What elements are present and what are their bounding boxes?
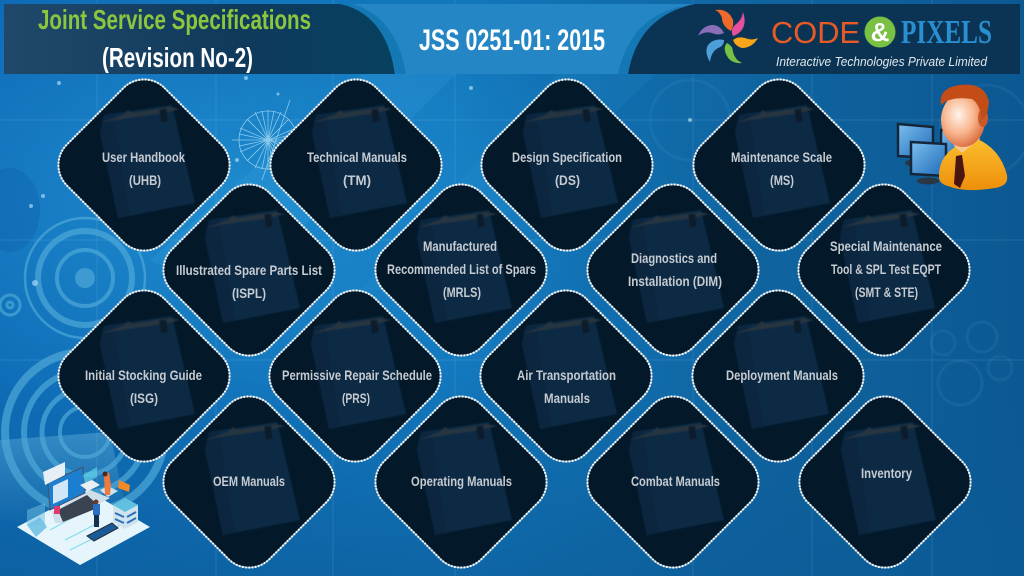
heading: standard number: JSS 0251-01: 2015 (419, 24, 605, 57)
card: Deployment Manuals: Deployment Manuals (726, 367, 838, 383)
card: Special Maintenance Tool (786, 172, 982, 368)
card: Technical Manuals (258, 67, 454, 263)
card: Technical Manuals: (TM) (343, 172, 371, 188)
card: Special Maintenance Tool: (SMT & STE) (855, 284, 918, 300)
card: Manufactured Recommended List of Spars: Manufactured (423, 238, 497, 254)
card: OEM Manuals (151, 384, 347, 576)
card: Diagnostics and Installation: Diagnostics and (631, 250, 717, 266)
card: Diagnostics and Installation: Installation (DIM) (628, 273, 722, 289)
card: Air Transportation Manuals: Manuals (544, 390, 590, 406)
card: Special Maintenance Tool: Tool & SPL Test EQPT (831, 261, 941, 277)
card: User Handbook: User Handbook (102, 149, 185, 165)
card: Operating Manuals (363, 384, 559, 576)
header panel: title (4, 4, 395, 74)
decorative starburst (232, 100, 310, 180)
card: Illustrated Spare Parts List (151, 172, 347, 368)
heading: title: Joint Service Specifications (38, 4, 311, 35)
card: Illustrated Spare Parts List: Illustrated Spare Parts List (176, 262, 322, 278)
icon: isometric laptop illustration (17, 462, 150, 565)
card: Design Specification (469, 67, 665, 263)
card: Combat Manuals (575, 384, 771, 576)
card: OEM Manuals: OEM Manuals (213, 473, 285, 489)
card: Illustrated Spare Parts List: (ISPL) (232, 285, 266, 301)
card: Permissive Repair Schedule: Permissive Repair Schedule (282, 367, 432, 383)
card: Permissive Repair Schedule (257, 278, 453, 474)
card: Permissive Repair Schedule: (PRS) (342, 390, 370, 406)
card: Combat Manuals: Combat Manuals (631, 473, 720, 489)
card: Inventory: Inventory (861, 465, 912, 481)
card: Initial Stocking Guide: Initial Stocking Guide (85, 367, 202, 383)
card: Maintenance Scale (681, 67, 877, 263)
card: Inventory (787, 384, 983, 576)
card: Manufactured Recommended List of Spars: Recommended List of Spars (387, 261, 536, 277)
icon: pinwheel logo (698, 10, 758, 63)
decorative rings (0, 218, 165, 512)
card: Special Maintenance Tool: Special Maintenance (830, 238, 942, 254)
card: Maintenance Scale: Maintenance Scale (731, 149, 832, 165)
card: Operating Manuals: Operating Manuals (411, 473, 512, 489)
card: User Handbook: (UHB) (129, 172, 161, 188)
header panel: logo (628, 4, 1020, 74)
text: tagline: Interactive Technologies Private Limited (776, 55, 988, 69)
icon: ampersand badge: & (871, 17, 889, 47)
card: Technical Manuals: Technical Manuals (307, 149, 407, 165)
card: Diagnostics and Installation (575, 172, 771, 368)
card: Manufactured Recommended List of Spars: (MRLS) (443, 284, 481, 300)
card: Initial Stocking Guide (46, 278, 242, 474)
card: Deployment Manuals (680, 278, 876, 474)
card: Air Transportation Manuals (468, 278, 664, 474)
card: Initial Stocking Guide: (ISG) (130, 390, 158, 406)
card: Maintenance Scale: (MS) (770, 172, 794, 188)
card: Design Specification: Design Specification (512, 149, 622, 165)
text: CODE: CODE (771, 15, 860, 50)
card: Design Specification: (DS) (555, 172, 580, 188)
card: Manufactured Recommended List of Spars (363, 172, 559, 368)
card: Air Transportation Manuals: Air Transportation (517, 367, 616, 383)
icon: person with monitors (898, 85, 1007, 190)
card: User Handbook (46, 67, 242, 263)
icon: ampersand badge (864, 16, 896, 48)
header panel: standard number (330, 4, 700, 74)
text: PIXELS: PIXELS (901, 14, 992, 51)
heading: revision: (Revision No-2) (102, 42, 253, 73)
